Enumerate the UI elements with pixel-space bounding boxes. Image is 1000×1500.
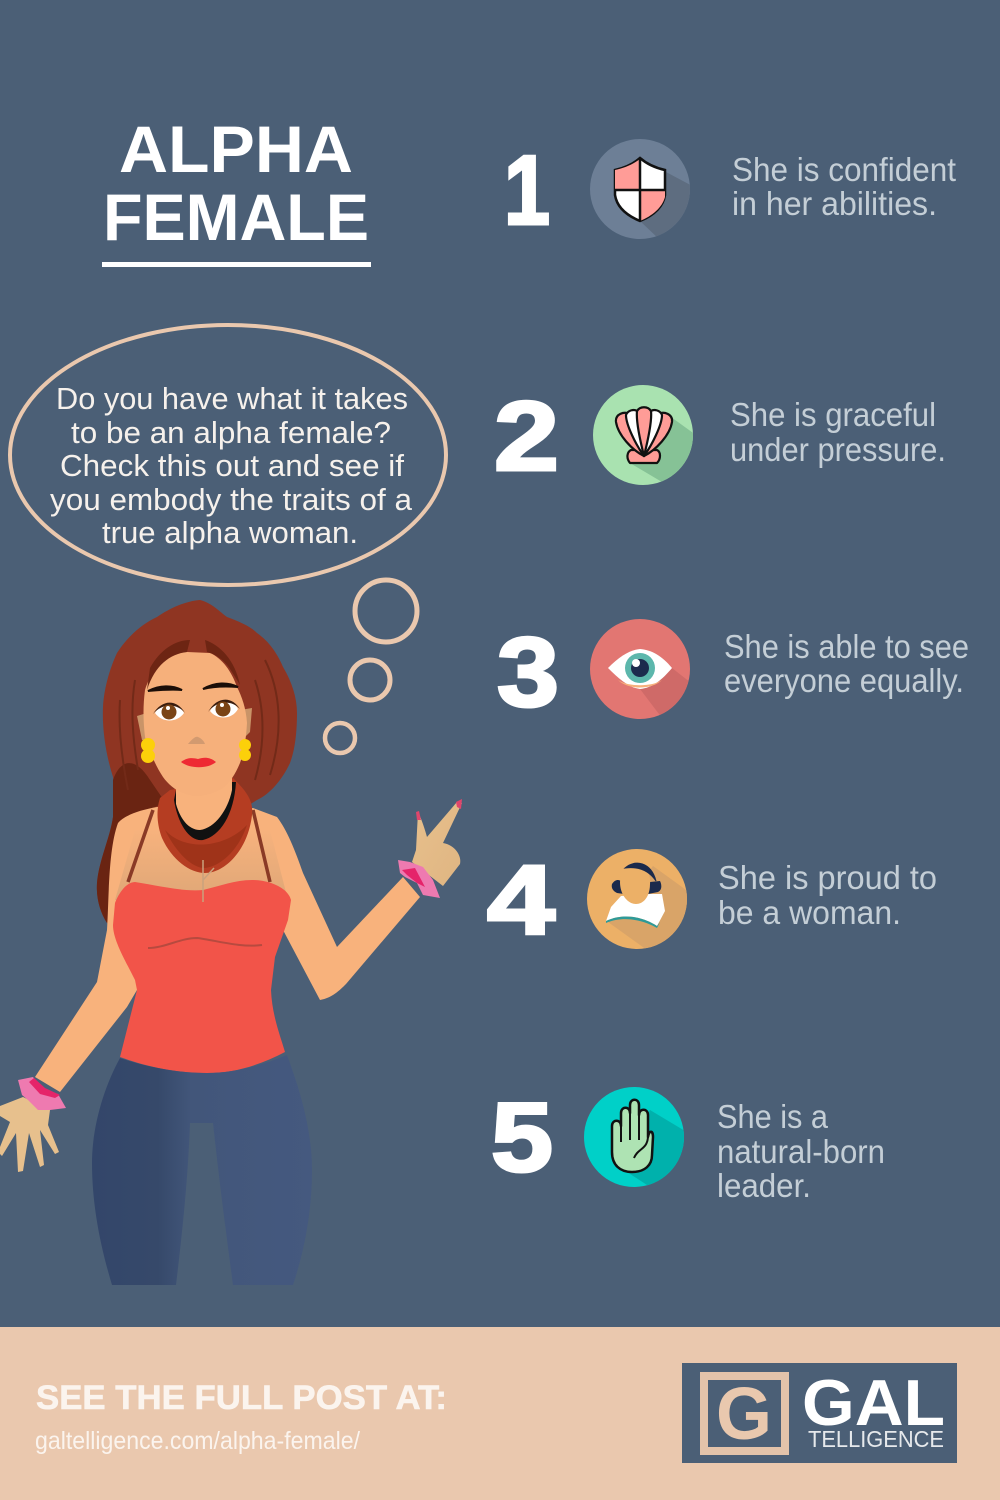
neck: [176, 770, 232, 830]
item 1 text: [732, 151, 956, 222]
item 5 number: 5: [491, 1082, 553, 1192]
footer text: [35, 1379, 447, 1455]
speech bubble: [10, 325, 446, 585]
item 3 text: [724, 628, 969, 699]
top: [113, 880, 291, 1073]
item 4 text: She is proud to: [718, 859, 937, 896]
straps: [128, 810, 153, 882]
item 2 number: 2: [494, 381, 559, 491]
left hand: [0, 1097, 59, 1172]
item 4 text: be a woman.: [718, 894, 901, 931]
speech bubble: true alpha woman.: [102, 515, 358, 550]
logo: GAL: [802, 1366, 945, 1439]
footer text: galtelligence.com/alpha-female/: [35, 1427, 360, 1455]
item 5 text: leader.: [717, 1167, 811, 1204]
icon: shield: [590, 139, 690, 239]
title: ALPHA: [119, 112, 353, 186]
illustration: woman: [0, 600, 462, 1285]
item 5 text: [717, 1098, 885, 1204]
right hand: [412, 802, 462, 886]
speech bubble: to be an alpha female?: [71, 415, 391, 450]
item 1 text: in her abilities.: [732, 185, 937, 222]
left scrunchie: [18, 1077, 66, 1110]
speech bubble: Check this out and see if: [60, 448, 404, 483]
title: [102, 112, 371, 267]
skin: torso and arms: [35, 807, 420, 1092]
item 1 number: 1: [504, 135, 550, 245]
brows: [148, 686, 182, 691]
icon: shell: [593, 385, 693, 485]
item 4 text: [718, 859, 937, 931]
item 3 number: 3: [497, 617, 559, 727]
logo: G: [716, 1372, 772, 1455]
nose: [188, 737, 205, 744]
footer band: [0, 1327, 1000, 1500]
logo: [682, 1363, 957, 1463]
neck shadow: [174, 782, 236, 840]
scarf: [158, 778, 252, 873]
speech bubble: you embody the traits of a: [50, 482, 413, 517]
earrings: [141, 738, 155, 752]
face: [144, 652, 247, 796]
icon: raised hand: [584, 1087, 684, 1187]
right scrunchie: [398, 860, 440, 898]
item 3 text: She is able to see: [724, 628, 969, 665]
item 2 text: [730, 396, 946, 468]
footer text: SEE THE FULL POST AT:: [36, 1379, 447, 1417]
icon: eye: [590, 619, 690, 719]
speech bubble: Do you have what it takes: [56, 381, 408, 416]
item 2 text: She is graceful: [730, 396, 936, 433]
item 3 text: everyone equally.: [724, 662, 964, 699]
icon: woman with book: [587, 849, 687, 949]
thought bubbles: [325, 580, 417, 753]
item 4 number: 4: [487, 845, 555, 955]
title: FEMALE: [103, 180, 369, 254]
hair back: [97, 600, 297, 923]
eyes: [155, 703, 184, 720]
fringe strands: [147, 640, 240, 690]
logo: TELLIGENCE: [808, 1426, 944, 1452]
item 1 text: She is confident: [732, 151, 956, 188]
item 5 text: She is a: [717, 1098, 829, 1135]
item 2 text: under pressure.: [730, 431, 946, 468]
lips: [181, 758, 216, 767]
item 5 text: natural-born: [717, 1133, 885, 1170]
hair shadow: [97, 763, 165, 923]
jeans: [92, 1055, 312, 1285]
ears: [137, 712, 152, 742]
